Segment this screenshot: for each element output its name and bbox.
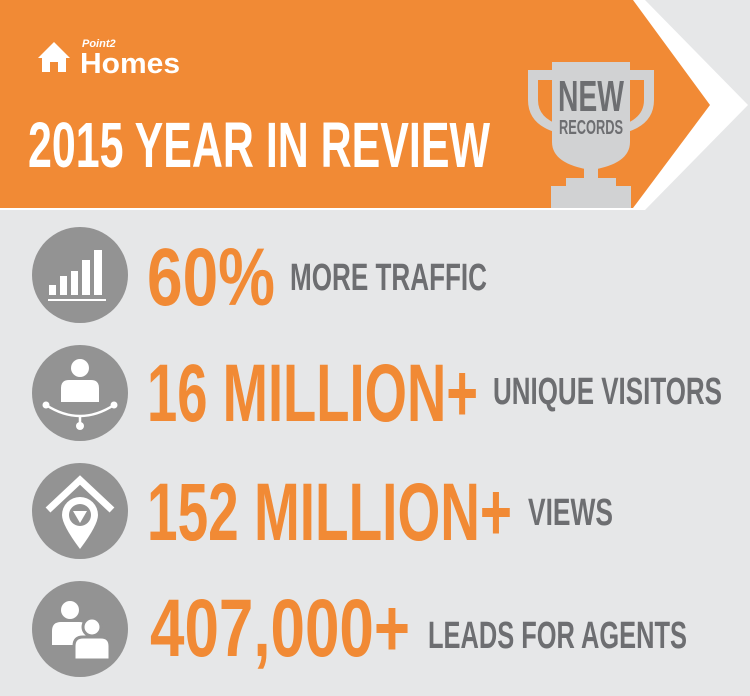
row 3: views: VIEWS (528, 492, 613, 534)
row 2: visitors (32, 345, 722, 441)
row 1: traffic (32, 227, 487, 323)
icon: trophy: NEW (558, 72, 624, 121)
logo: Point2 (82, 38, 116, 50)
logo (38, 38, 180, 80)
header banner (0, 0, 748, 210)
row 2: visitors: 16 MILLION+ (147, 348, 478, 439)
icon: trophy: RECORDS (559, 117, 623, 139)
logo: Homes (80, 48, 180, 80)
icon: trophy (528, 62, 654, 208)
row 3: views: 152 MILLION+ (147, 467, 512, 558)
title: 2015 YEAR IN REVIEW (28, 109, 490, 181)
icon: bar chart (32, 227, 128, 323)
row 4: leads: 407,000+ (150, 583, 410, 674)
icon: house pin (32, 463, 128, 559)
icon: two people (32, 581, 128, 677)
row 1: traffic: MORE TRAFFIC (290, 257, 487, 299)
icon: person network (32, 345, 128, 441)
row 4: leads (32, 581, 687, 677)
row 3: views (32, 463, 613, 559)
row 1: traffic: 60% (147, 232, 275, 323)
